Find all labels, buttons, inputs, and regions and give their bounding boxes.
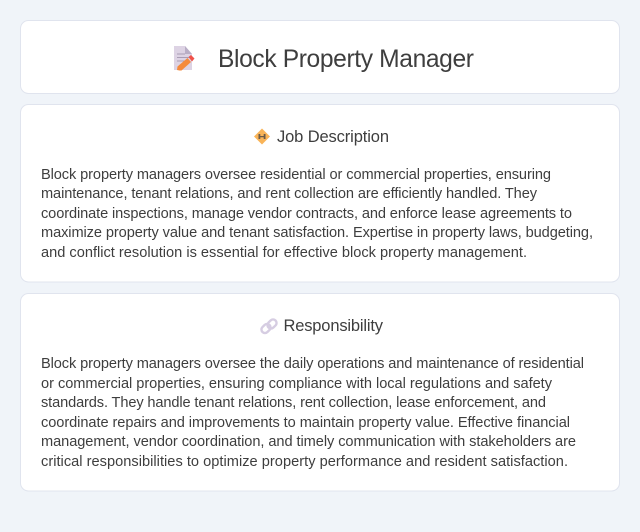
heading: responsibility: Responsibility <box>284 317 384 335</box>
text block: job description: maintenance, tenant relations, and rent collection are efficiently handled. They <box>41 186 538 202</box>
text block: job description: Block property managers oversee residential or commercial properties, ensuring <box>41 167 551 183</box>
text block: responsibility: management, vendor coordination, and timely communication with stakeholders are <box>41 434 576 450</box>
text block: responsibility: critical responsibilities to optimize property performance and resident satisfaction. <box>41 454 568 470</box>
text block: job description <box>41 167 593 261</box>
text block: job description: maximize property value and tenant satisfaction. Expertise in property laws, budgeting, <box>41 225 593 241</box>
text block: responsibility: Block property managers oversee the daily operations and maintenance of residential <box>41 356 584 372</box>
text block: responsibility: coordinate repairs and improvements to maintain property value. Effective financial <box>41 415 570 431</box>
panel: responsibility <box>20 294 620 491</box>
panel: job description <box>20 104 620 282</box>
icon: chain link <box>260 318 278 335</box>
text block: job description: coordinate inspections, manage vendor contracts, and enforce lease agreements to <box>41 206 572 222</box>
text block: job description: and conflict resolution is essential for effective block property management. <box>41 245 527 261</box>
title: Block Property Manager <box>218 46 474 73</box>
icon: document with pencil <box>174 46 194 70</box>
icon: diamond sign <box>254 128 270 144</box>
text block: responsibility <box>41 356 584 470</box>
text block: responsibility: standards. They handle tenant relations, rent collection, lease enforcement, and <box>41 395 546 411</box>
text block: responsibility: or commercial properties, ensuring compliance with local regulations and safety <box>41 376 553 392</box>
heading: job description: Job Description <box>277 128 389 146</box>
panel: title card <box>20 20 620 94</box>
